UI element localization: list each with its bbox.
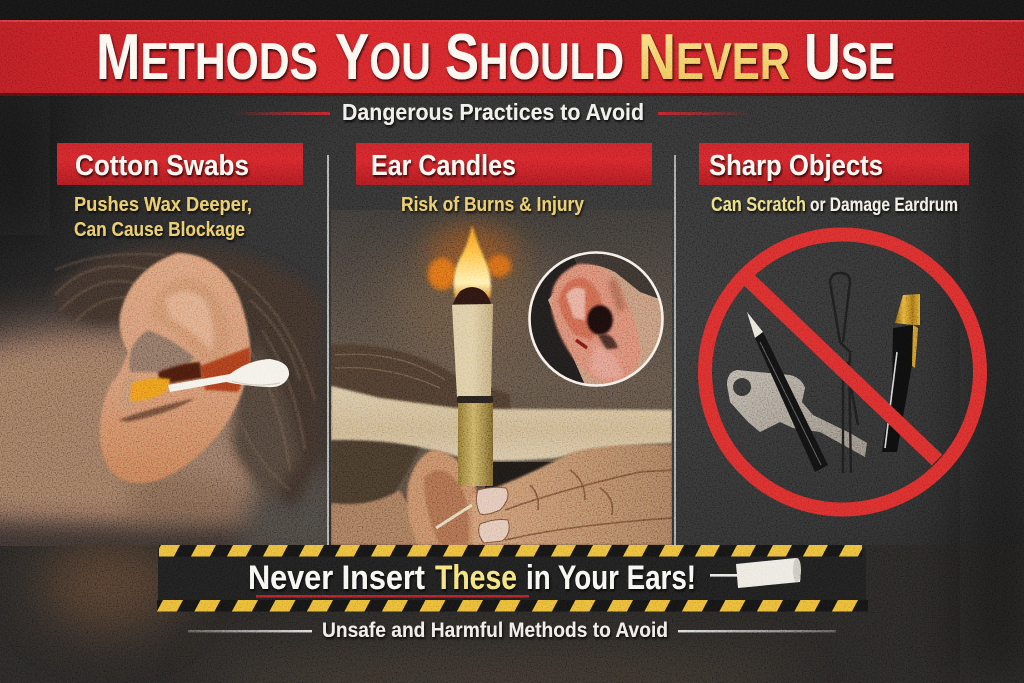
- icon: prohibition sign: [705, 234, 980, 510]
- towel band: [331, 386, 672, 461]
- panel: sharp objects: [705, 234, 980, 510]
- icon: hand: [472, 445, 672, 545]
- hair: [50, 245, 326, 510]
- warning text: These: [435, 559, 517, 597]
- icon: pencil: [747, 312, 828, 472]
- subtitle: Dangerous Practices to Avoid: [342, 99, 644, 125]
- heading: ear candles: Ear Candles: [371, 150, 516, 182]
- heading: cotton swabs: Cotton Swabs: [75, 150, 249, 182]
- icon: earwax on swab: [130, 347, 250, 401]
- footer caption: Unsafe and Harmful Methods to Avoid: [322, 619, 668, 642]
- icon: hairpin: [830, 273, 858, 473]
- inset: burned ear: [525, 250, 663, 390]
- panel: ear candles photo: [325, 210, 672, 545]
- title: [96, 20, 895, 93]
- warning text: in Your Ears!: [526, 559, 696, 597]
- text: cotton swabs description: Can Cause Blockage: [74, 219, 245, 241]
- text: sharp objects description: [711, 194, 958, 216]
- text: cotton swabs description: Pushes Wax Deeper,: [74, 194, 252, 216]
- title: METHODS: [96, 20, 318, 93]
- warning text: [248, 559, 696, 597]
- subtitle: [233, 99, 752, 125]
- title: NEVER: [638, 20, 790, 93]
- icon: ear lower: [407, 450, 479, 545]
- warning text: Never Insert: [248, 559, 425, 597]
- icon: pen: [882, 294, 920, 452]
- icon: thin stick: [436, 505, 472, 528]
- heading: sharp objects: Sharp Objects: [709, 150, 883, 182]
- icon: ear candle: [452, 304, 493, 486]
- text: sharp objects description: Can Scratch: [711, 194, 806, 216]
- text: ear candles description: Risk of Burns & Injury: [401, 194, 585, 216]
- heading: sharp objects: [699, 143, 969, 185]
- text: cotton swabs description: [74, 194, 252, 241]
- warning banner: [157, 545, 868, 612]
- heading: ear candles: [356, 143, 652, 185]
- title banner: [0, 20, 1024, 96]
- hair lower: [331, 441, 420, 510]
- text: sharp objects description: or Damage Eardrum: [810, 195, 958, 216]
- heading: cotton swabs: [57, 143, 303, 185]
- title: USE: [804, 20, 895, 93]
- icon: flame: [428, 225, 516, 304]
- panel: cotton swabs photo: [0, 242, 327, 546]
- hair on head: [325, 344, 510, 420]
- title: YOU: [335, 20, 431, 93]
- icon: key: [727, 370, 867, 457]
- icon: ear: [100, 253, 250, 483]
- skin lower left: [331, 490, 430, 545]
- title: SHOULD: [445, 20, 624, 93]
- icon: cotton swab: [168, 359, 289, 392]
- icon: swab tip: [710, 558, 801, 588]
- dividers: [327, 155, 676, 545]
